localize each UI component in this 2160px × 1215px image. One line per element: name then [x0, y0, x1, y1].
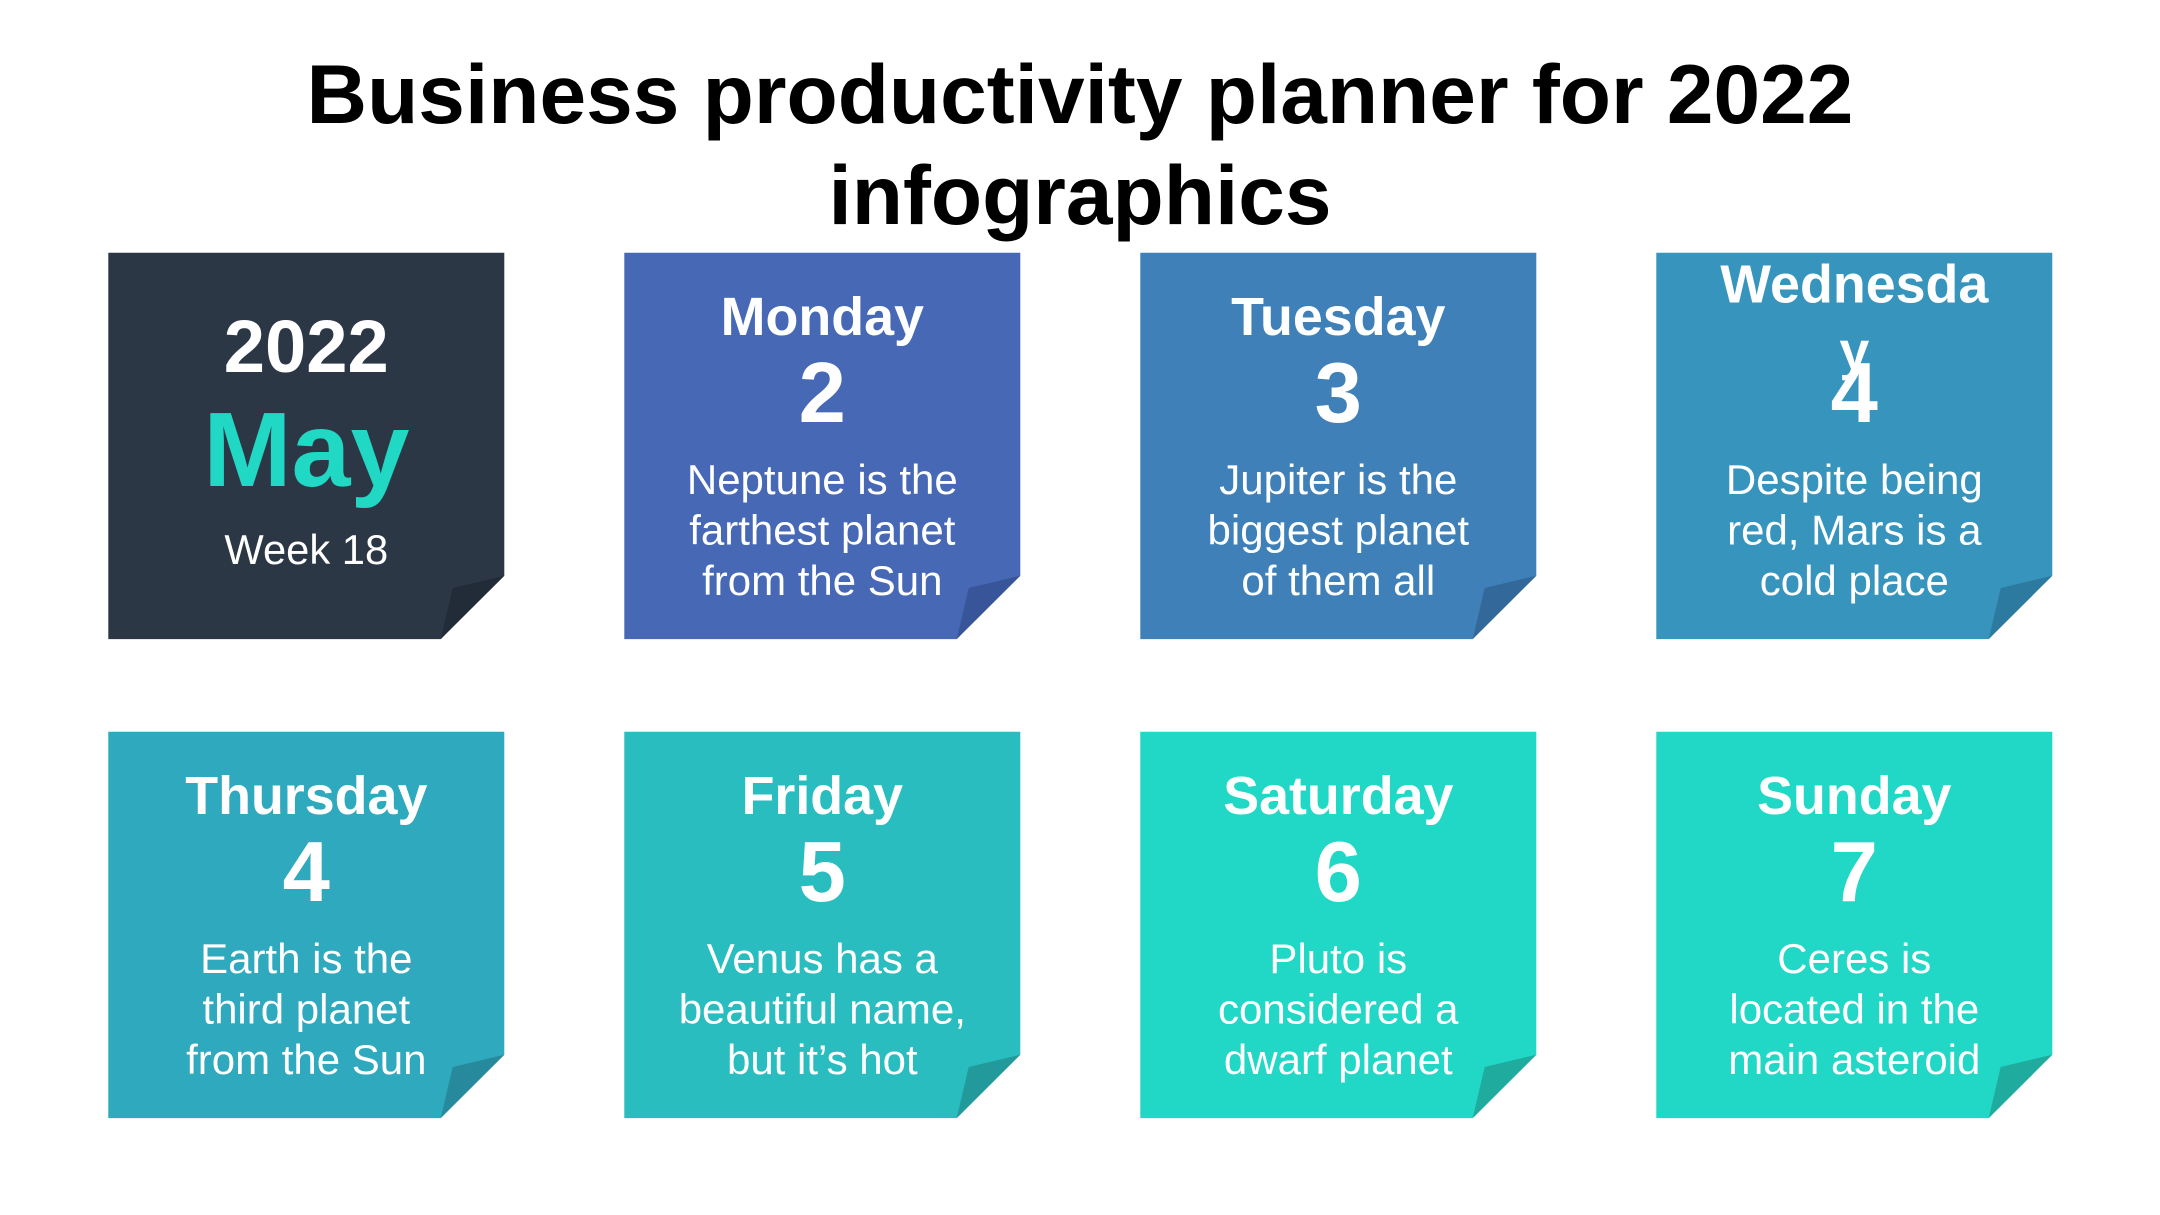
description: Venus has a — [707, 935, 939, 982]
card shape — [1140, 253, 1536, 639]
description: biggest planet — [1208, 507, 1469, 554]
date number: 4 — [1831, 346, 1878, 441]
day name: Monday — [721, 287, 924, 347]
card shape — [624, 253, 1020, 639]
description: farthest planet — [689, 507, 956, 554]
description: dwarf planet — [1224, 1036, 1453, 1083]
card shape — [108, 253, 504, 639]
week: Week 18 — [224, 526, 388, 573]
panel: Wednesday — [1656, 253, 2052, 639]
page fold — [441, 576, 504, 639]
description: considered a — [1218, 986, 1459, 1033]
page fold — [1989, 1055, 2052, 1118]
description: third planet — [202, 986, 411, 1033]
page fold — [441, 1055, 504, 1118]
date number: 6 — [1315, 825, 1362, 920]
description — [1208, 456, 1469, 604]
card shape — [1656, 253, 2052, 639]
description: Earth is the — [200, 935, 413, 982]
day name: Sunday — [1757, 766, 1952, 826]
day name: Saturday — [1223, 766, 1453, 826]
day name: y — [1839, 322, 1869, 382]
description — [679, 935, 966, 1083]
date number: 2 — [799, 346, 846, 441]
panel: Saturday — [1140, 732, 1536, 1118]
page fold — [1989, 576, 2052, 639]
description: Neptune is the — [687, 456, 958, 503]
panel: Tuesday — [1140, 253, 1536, 639]
title: infographics — [828, 148, 1332, 242]
description: Jupiter is the — [1219, 456, 1457, 503]
panel: Thursday — [108, 732, 504, 1118]
date number: 3 — [1315, 346, 1362, 441]
description: but it’s hot — [727, 1036, 918, 1083]
page fold — [1473, 576, 1536, 639]
day name: Friday — [742, 766, 903, 826]
day name — [1720, 255, 1989, 382]
title — [307, 47, 1853, 242]
description — [687, 456, 958, 604]
card shape — [624, 732, 1020, 1118]
date number: 7 — [1831, 825, 1878, 920]
day name: Tuesday — [1231, 287, 1446, 347]
description: from the Sun — [702, 557, 943, 604]
panel: Sunday — [1656, 732, 2052, 1118]
day name: Thursday — [185, 766, 427, 826]
description: of them all — [1241, 557, 1435, 604]
page fold — [957, 576, 1020, 639]
title: Business productivity planner for 2022 — [307, 47, 1853, 141]
date number: 5 — [799, 825, 846, 920]
description — [186, 935, 427, 1083]
description: Pluto is — [1269, 935, 1407, 982]
description — [1218, 935, 1459, 1083]
description — [1728, 935, 1980, 1083]
description: Despite being — [1726, 456, 1983, 503]
day name: Wednesda — [1720, 255, 1989, 315]
description: located in the — [1729, 986, 1979, 1033]
panel: Friday — [624, 732, 1020, 1118]
description: from the Sun — [186, 1036, 427, 1083]
card shape — [1656, 732, 2052, 1118]
description — [1726, 456, 1983, 604]
year: 2022 — [224, 305, 389, 388]
card shape — [1140, 732, 1536, 1118]
description: red, Mars is a — [1727, 507, 1982, 554]
page fold — [957, 1055, 1020, 1118]
page fold — [1473, 1055, 1536, 1118]
month: May — [203, 391, 409, 509]
description: Ceres is — [1777, 935, 1931, 982]
description: main asteroid — [1728, 1036, 1980, 1083]
panel: 2022 May — [108, 253, 504, 639]
description: beautiful name, — [679, 986, 966, 1033]
card shape — [108, 732, 504, 1118]
panel: Monday — [624, 253, 1020, 639]
description: cold place — [1760, 557, 1949, 604]
date number: 4 — [283, 825, 330, 920]
